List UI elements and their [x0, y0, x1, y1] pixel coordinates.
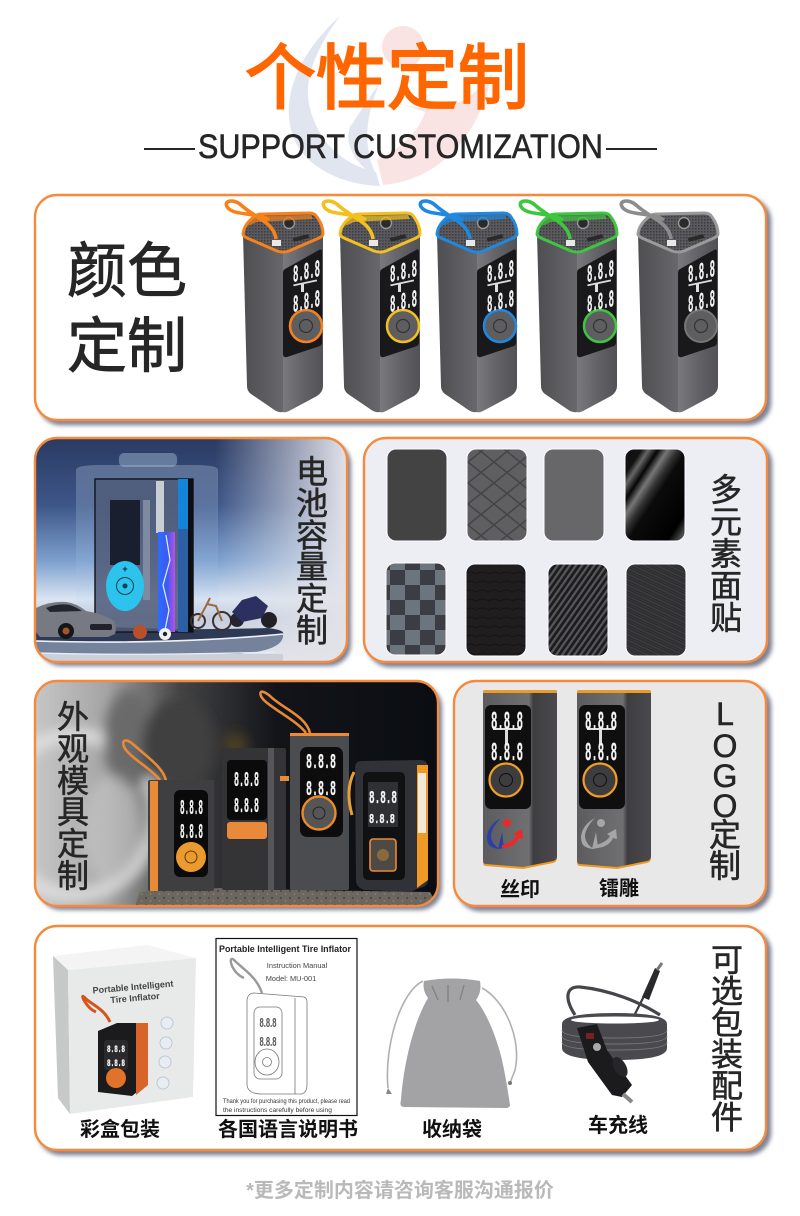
manual title: Portable Intelligent Tire Inflator [219, 943, 351, 954]
product: silk-screen logo [483, 690, 557, 869]
heading: material overlays: 元 [710, 504, 742, 540]
product: engraved logo [577, 690, 651, 869]
footnote: *更多定制内容请咨询客服沟通报价 [246, 1178, 554, 1202]
product: engraved logo: 8.8.8 [585, 707, 617, 737]
title: 个性定制 [245, 40, 529, 119]
label: car charger: 车充线 [588, 1113, 648, 1137]
heading: battery capacity: 容 [296, 517, 328, 553]
instruction manual [216, 938, 357, 1116]
inflator A: 8.8.8 [180, 822, 203, 845]
blurred wheel [0, 690, 247, 895]
heading: color customization: 定制 [67, 313, 187, 380]
product: orange [226, 201, 323, 412]
heading: material overlays: 贴 [710, 600, 742, 636]
heading: optional accessories: 选 [711, 974, 743, 1010]
heading: optional accessories: 可 [711, 942, 743, 978]
product: yellow [323, 201, 420, 412]
colour box: Tire Inflator [110, 991, 161, 1005]
instruction manual: 8.8.8 [260, 1034, 276, 1049]
swatch: matte grey [544, 449, 604, 541]
cyan button [106, 561, 144, 611]
heading: material overlays: 面 [710, 568, 742, 604]
label: colour box: 彩盒包装 [80, 1117, 160, 1141]
battery glass [76, 453, 218, 560]
heading: mold appearance: 观 [57, 731, 89, 767]
panel: battery capacity [35, 438, 347, 662]
instruction manual: 8.8.8 [260, 1015, 276, 1030]
heading: battery capacity: 电 [296, 454, 328, 490]
product: grey [621, 201, 718, 412]
heading: battery capacity: 量 [296, 549, 328, 585]
logo: colour [487, 818, 523, 849]
watermark logo [289, 16, 492, 186]
product: silk-screen logo: 8.8.8 [491, 707, 523, 737]
inflator D [349, 760, 428, 892]
panel: color customization [35, 195, 766, 420]
heading: optional accessories: 装 [711, 1036, 743, 1072]
product: silk-screen logo: 8.8.8 [491, 738, 523, 768]
heading: mold appearance: 制 [57, 858, 89, 894]
heading: optional accessories: 件 [711, 1100, 743, 1136]
swatch: leather [466, 564, 526, 656]
swatch: suede [387, 449, 447, 541]
basketball [133, 625, 147, 639]
heading: logo customization: O [713, 728, 737, 764]
heading: optional accessories: 包 [711, 1005, 743, 1041]
panel: color customization: 8.8.8 [487, 257, 514, 290]
inflator A [123, 741, 214, 891]
inflator B [222, 748, 289, 890]
heading: mold appearance: 定 [57, 826, 89, 862]
storage pouch [386, 978, 517, 1108]
box title: Portable Intelligent [92, 978, 174, 996]
colour box [53, 945, 196, 1114]
rock [135, 888, 438, 906]
panel: color customization: 8.8.8 [688, 257, 715, 290]
panel: color customization: 8.8.8 [390, 287, 417, 320]
sports car [36, 602, 116, 639]
panel: logo customization [454, 681, 766, 906]
swatch: checker [386, 563, 446, 655]
car charger cable [562, 963, 667, 1102]
heading: color customization: 颜色 [67, 238, 187, 305]
instruction manual: the instructions carefully before using [223, 1107, 332, 1114]
panel: color customization: 8.8.8 [587, 287, 614, 320]
product: blue [420, 201, 517, 412]
heading: optional accessories: 配 [711, 1068, 743, 1104]
swatch: carbon [548, 564, 608, 656]
heading: battery capacity: 定 [296, 581, 328, 617]
label: laser engraving: 镭雕 [599, 877, 639, 900]
motorcycle [230, 596, 277, 628]
colour box: 8.8.8 [107, 1045, 125, 1056]
heading: logo customization: O [713, 788, 737, 824]
heading: battery capacity: 制 [296, 612, 328, 648]
swatch: quilted [467, 449, 527, 541]
logo: engraved [581, 818, 617, 849]
panel: color customization: 8.8.8 [293, 257, 320, 290]
label: multilingual manual: 各国语言说明书 [218, 1117, 358, 1141]
heading: logo customization: 制 [709, 848, 741, 884]
football [159, 628, 171, 640]
heading: logo customization: 定 [709, 817, 741, 853]
inflator C [260, 692, 349, 890]
panel: color customization: 8.8.8 [587, 257, 614, 290]
colour box: 8.8.8 [107, 1059, 125, 1070]
panel: optional packaging accessories [35, 926, 766, 1150]
heading: mold appearance: 模 [57, 763, 89, 799]
inflator B: 8.8.8 [234, 770, 259, 793]
panel: material overlays [364, 438, 767, 662]
panel: color customization: 8.8.8 [688, 287, 715, 320]
product: engraved logo: 8.8.8 [585, 738, 617, 768]
heading: logo customization: G [713, 758, 737, 794]
inflator A: 8.8.8 [180, 798, 203, 821]
swatch: saffiano [626, 564, 686, 656]
subtitle: SUPPORT CUSTOMIZATION [198, 128, 603, 166]
heading: color customization [67, 238, 187, 380]
panel: color customization: 8.8.8 [293, 287, 320, 320]
cyan button: + [122, 564, 128, 574]
product: green [520, 201, 617, 412]
heading: logo customization: L [716, 696, 734, 732]
inflator D: 8.8.8 [369, 812, 395, 828]
inflator D: 8.8.8 [369, 789, 397, 809]
inflator C: 8.8.8 [306, 752, 336, 775]
line drawing: inflator [231, 959, 307, 1094]
heading: mold appearance: 外 [57, 699, 89, 735]
panel: mold appearance [0, 681, 438, 906]
heading: material overlays: 素 [710, 536, 742, 572]
heading: battery capacity: 池 [296, 486, 328, 522]
instruction manual: Thank you for purchasing this product, please read [223, 1098, 350, 1105]
bicycle [191, 598, 231, 630]
inflator cutaway [95, 479, 193, 632]
swatch: gloss black [625, 449, 685, 541]
label: pouch: 收纳袋 [422, 1118, 482, 1141]
label: silk-screen: 丝印 [500, 878, 540, 901]
panel: color customization: 8.8.8 [487, 287, 514, 320]
inflator C: 8.8.8 [306, 779, 336, 802]
instruction manual: Instruction Manual [267, 961, 328, 970]
display stage [36, 627, 284, 661]
inflator B: 8.8.8 [234, 796, 259, 819]
heading: mold appearance: 具 [57, 794, 89, 830]
instruction manual: Model: MU-001 [266, 974, 316, 983]
panel: color customization: 8.8.8 [390, 257, 417, 290]
heading: material overlays: 多 [710, 472, 742, 508]
